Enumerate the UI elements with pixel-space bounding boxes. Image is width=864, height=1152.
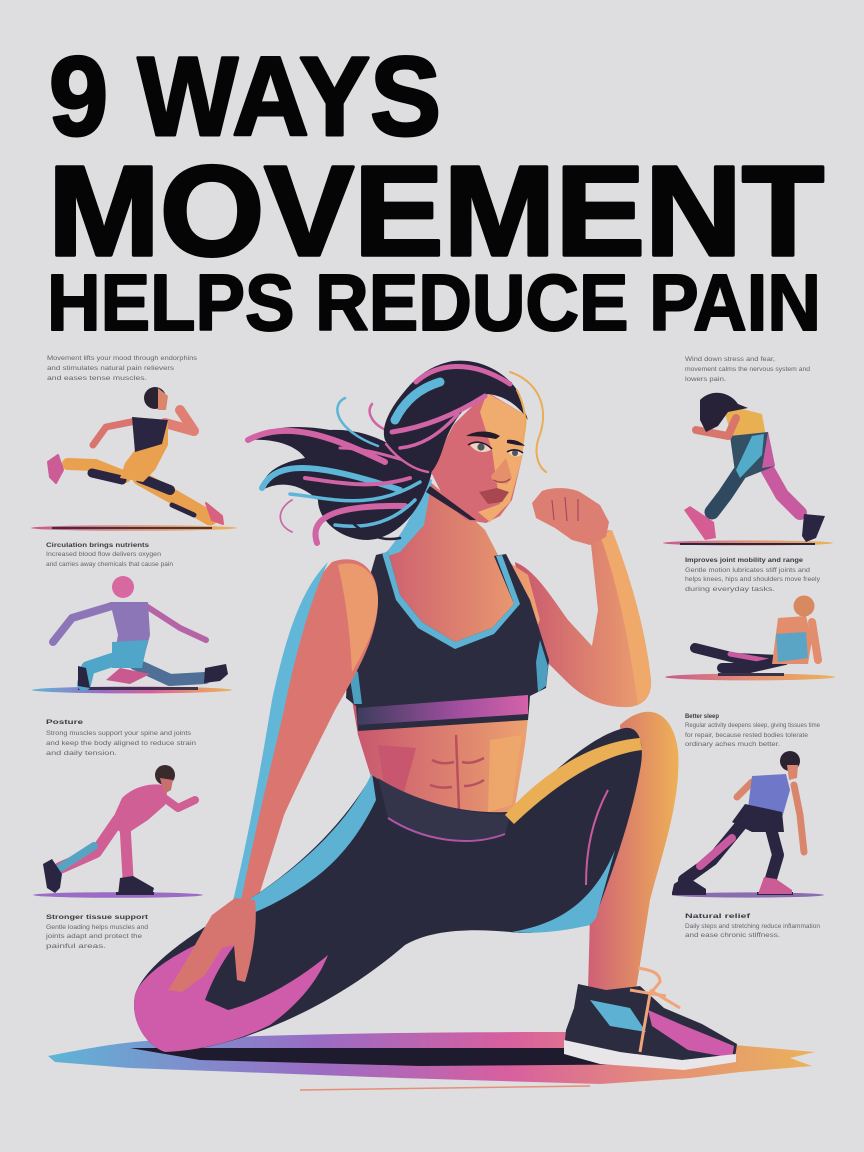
text block: left 2: Increased blood flow delivers oxygen xyxy=(46,551,161,558)
figure: right 2 reclining xyxy=(665,596,835,680)
text block: left 1: and eases tense muscles. xyxy=(47,375,147,382)
text block: left 3: Posture xyxy=(46,719,83,726)
blue neck accent xyxy=(382,474,432,558)
text block: right 2: Gentle motion lubricates stiff joints and xyxy=(685,567,810,574)
text block: right 2: helps knees, hips and shoulders move freely xyxy=(685,576,821,583)
top xyxy=(346,552,549,731)
text block: right 4 xyxy=(685,913,820,939)
face xyxy=(430,392,527,523)
near arm xyxy=(235,559,378,905)
jaw shadow xyxy=(426,486,476,520)
text block: left 2: Circulation brings nutrients xyxy=(46,542,149,549)
text block: right 2: during everyday tasks. xyxy=(685,586,775,593)
yellow knee arc xyxy=(505,738,642,824)
leggings xyxy=(134,728,642,1052)
torso xyxy=(352,700,530,825)
text block: left 1: and stimulates natural pain relievers xyxy=(47,365,175,372)
text block: right 1: lowers pain. xyxy=(685,376,726,383)
eyes xyxy=(470,443,492,452)
lips xyxy=(479,488,509,504)
text block: right 4: and ease chronic stiffness. xyxy=(685,932,780,939)
title: HELPS REDUCE PAIN xyxy=(47,258,821,347)
title xyxy=(47,34,824,347)
hand xyxy=(168,898,256,992)
hair top xyxy=(384,361,528,476)
text block: right 3: Better sleep xyxy=(685,713,719,720)
figure: left 1 runner xyxy=(31,387,237,531)
text block: right 3: ordinary aches much better. xyxy=(685,741,780,748)
nose xyxy=(491,458,512,484)
shoe xyxy=(564,984,737,1066)
figure: right 1 walker xyxy=(663,393,833,546)
blue under thigh xyxy=(512,850,615,933)
text block: left 4: painful areas. xyxy=(46,943,106,950)
text block: right 2: Improves joint mobility and range xyxy=(685,557,803,564)
text block: left 3 xyxy=(46,719,196,757)
title: 9 WAYS xyxy=(49,34,441,159)
text block: left 3: Strong muscles support your spine and joints xyxy=(46,730,192,737)
far arm xyxy=(515,530,651,707)
text block: right 4: Daily steps and stretching reduce inflammation xyxy=(685,923,820,930)
blue arm edge xyxy=(232,562,328,906)
title: MOVEMENT xyxy=(48,140,824,283)
figure: left 2 crouch xyxy=(32,576,232,693)
text block: left 2: and carries away chemicals that cause pain xyxy=(46,561,173,568)
hair tail xyxy=(248,427,432,540)
text block: left 2 xyxy=(46,542,173,568)
text block: right 3: Regular activity deepens sleep, giving tissues time xyxy=(685,722,820,729)
lower front leg xyxy=(588,712,678,990)
text block: left 1: Movement lifts your mood through endorphins xyxy=(47,355,198,362)
text block: left 4: Stronger tissue support xyxy=(46,914,149,921)
text block: left 3: and daily tension. xyxy=(46,750,117,757)
fist xyxy=(532,488,609,545)
text block: left 4 xyxy=(45,914,149,950)
text block: left 3: and keep the body aligned to reduce strain xyxy=(46,740,196,747)
figure: left 3 runner pink xyxy=(33,765,203,898)
pink knee xyxy=(134,922,328,1052)
text block: right 3 xyxy=(685,713,820,748)
text block: right 3: for repair, because rested bodies tolerate xyxy=(685,732,808,739)
ground shadow xyxy=(48,1032,815,1090)
text block: left 4: Gentle loading helps muscles and xyxy=(46,924,148,931)
waistband xyxy=(378,778,510,842)
text block: right 1: Wind down stress and fear, xyxy=(685,356,775,363)
main figure: athlete xyxy=(134,361,737,1070)
blue back edge xyxy=(205,773,376,925)
brows xyxy=(466,432,500,439)
neck and chest xyxy=(360,480,540,690)
figure: right 3 lunge xyxy=(672,751,824,898)
text block: right 4: Natural relief xyxy=(685,913,751,920)
text block: right 1: movement calms the nervous system and xyxy=(685,366,810,373)
text block: right 2 xyxy=(685,557,821,593)
text block: right 1 xyxy=(685,356,810,383)
text block: left 1 xyxy=(47,355,198,382)
text block: left 4: joints adapt and protect the xyxy=(45,933,142,940)
